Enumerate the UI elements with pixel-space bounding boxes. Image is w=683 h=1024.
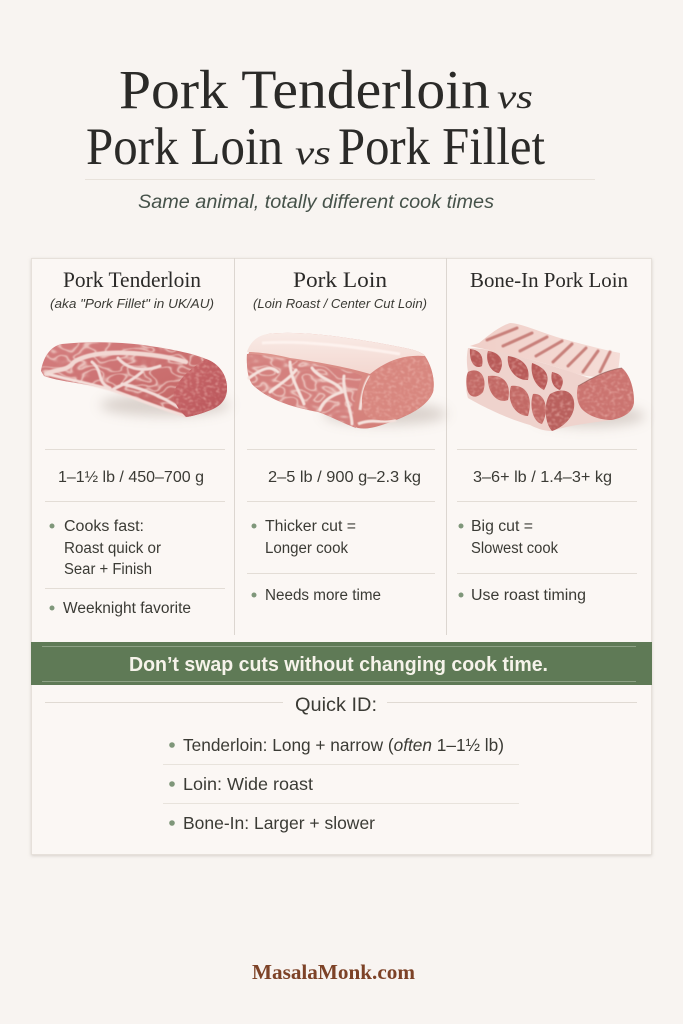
bullet: needs more time: Needs more time <box>265 587 381 604</box>
subtitle: Same animal, totally different cook times <box>138 191 494 213</box>
panel: comparison card <box>31 258 652 854</box>
column: pork loin <box>247 267 447 604</box>
image: tenderloin meat <box>41 342 230 417</box>
image: pork loin meat <box>247 333 447 429</box>
subheading: loin roast: (Loin Roast / Center Cut Loin) <box>253 296 427 311</box>
column: pork tenderloin <box>41 267 230 617</box>
banner: warning: Don’t swap cuts without changing cook time. <box>129 653 548 676</box>
bullet: use roast timing: Use roast timing <box>471 587 586 604</box>
title: Pork Loin <box>86 118 283 176</box>
bullet: thicker cut <box>252 518 356 557</box>
bullet: big cut <box>458 518 558 557</box>
banner: warning <box>31 642 652 685</box>
weight: tenderloin: 1–1½ lb / 450–700 g <box>58 469 204 486</box>
bullet: thicker cut: Thicker cut = <box>265 518 356 535</box>
heading: bone-in pork loin: Bone-In Pork Loin <box>470 268 628 292</box>
bullet: big cut: Slowest cook <box>471 540 558 557</box>
heading: pork tenderloin: Pork Tenderloin <box>63 267 201 292</box>
title: Pork Fillet <box>338 118 545 176</box>
list item: bone-in: Bone-In: Larger + slower <box>183 813 375 833</box>
list item: tenderloin: Tenderloin: Long + narrow (often 1–1½ lb) <box>183 735 504 755</box>
bullet: cooks fast: Sear + Finish <box>64 561 152 578</box>
bullet: cooks fast: Cooks fast: <box>64 518 144 535</box>
subheading: tenderloin aka: (aka "Pork Fillet" in UK/AU) <box>50 296 214 311</box>
bullet: cooks fast <box>50 518 161 578</box>
title <box>86 59 545 176</box>
column: bone-in pork loin <box>457 268 645 604</box>
title: Pork Tenderloin <box>119 59 490 120</box>
heading: pork loin: Pork Loin <box>293 267 387 292</box>
title: vs <box>497 79 533 116</box>
section: quick id <box>45 695 637 833</box>
heading: quick id: Quick ID: <box>295 695 377 716</box>
bullet: thicker cut: Longer cook <box>265 540 348 557</box>
footer: website: MasalaMonk.com <box>252 960 416 984</box>
bullet: big cut: Big cut = <box>471 518 533 535</box>
image: bone-in meat <box>466 323 645 431</box>
list item: loin: Loin: Wide roast <box>183 774 313 794</box>
weight: bone-in: 3–6+ lb / 1.4–3+ kg <box>473 469 612 486</box>
bullet: weeknight favorite: Weeknight favorite <box>63 600 191 617</box>
title: vs <box>295 135 331 172</box>
bullet: cooks fast: Roast quick or <box>64 540 161 557</box>
weight: loin: 2–5 lb / 900 g–2.3 kg <box>268 469 421 486</box>
